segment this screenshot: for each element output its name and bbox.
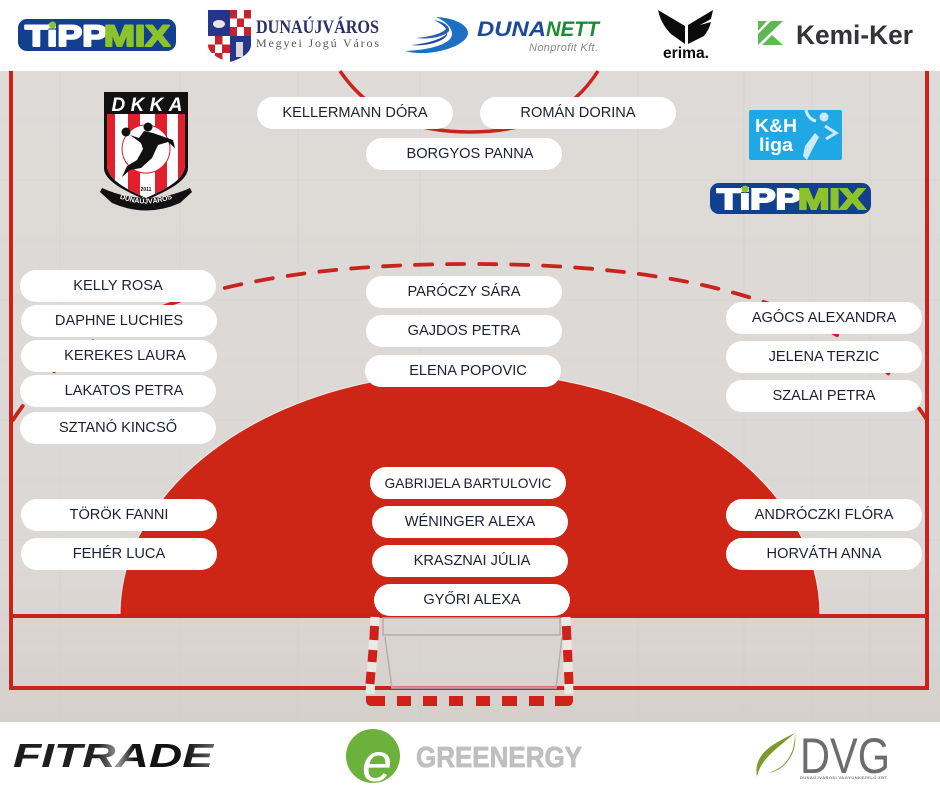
player: Agócs Alexandra: AGÓCS ALEXANDRA (752, 310, 896, 326)
player: Elena Popovic (365, 355, 561, 387)
player: Agócs Alexandra (726, 302, 922, 334)
logo: Dunaújváros crest and name (208, 10, 379, 62)
player: Kellermann Dóra: KELLERMANN DÓRA (282, 105, 428, 121)
logo: Dunanett (405, 17, 601, 54)
player: Gajdos Petra: GAJDOS PETRA (408, 323, 520, 339)
logo: DVG (756, 728, 890, 784)
player: Andróczki Flóra: ANDRÓCZKI FLÓRA (755, 507, 893, 523)
player: Török Fanni: TÖRÖK FANNI (70, 507, 168, 523)
player: Jelena Terzic: JELENA TERZIC (769, 349, 879, 365)
logo: Tippmix top: MIX (104, 20, 170, 53)
player: Krasznai Júlia (372, 545, 568, 577)
logo: DKKA club shield (100, 92, 192, 210)
logo: K&H liga: liga (759, 134, 794, 155)
player: Román Dorina (480, 97, 676, 129)
player: Sztanó Kincső (20, 412, 216, 444)
logo: K&H liga (749, 110, 842, 160)
goal (366, 617, 573, 706)
logo: DVG: DUNAÚJVÁROSI VAGYONKEZELŐ ZRT. (800, 775, 888, 780)
player: Lakatos Petra: LAKATOS PETRA (65, 383, 183, 399)
red six metre goal area (120, 372, 820, 615)
player: Andróczki Flóra (726, 499, 922, 531)
player: Gabrijela Bartulovic (370, 467, 566, 499)
player: Horváth Anna (726, 538, 922, 570)
player: Wéninger Alexa: WÉNINGER ALEXA (405, 514, 535, 530)
logo: Greenergy (346, 729, 582, 788)
player: Horváth Anna: HORVÁTH ANNA (767, 546, 881, 562)
logo: Dunaújváros crest and name: Megyei Jogú Város (256, 36, 379, 50)
court lines (11, 71, 927, 688)
player: Kellermann Dóra (257, 97, 453, 129)
logo: Tippmix league: TiPP (717, 184, 801, 216)
player: Daphne Luchies (21, 305, 217, 337)
logo: Erima (658, 10, 713, 62)
player: Kerekes Laura: KEREKES LAURA (64, 348, 186, 364)
player: Fehér Luca: FEHÉR LUCA (73, 546, 165, 562)
player: Borgyos Panna (366, 138, 562, 170)
logo: DVG: DVG (800, 728, 890, 784)
player: Szalai Petra (726, 380, 922, 412)
logo: Dunaújváros crest and name: DUNAÚJVÁROS (256, 16, 379, 38)
player: Román Dorina: ROMÁN DORINA (520, 105, 636, 121)
logo: Tippmix league (710, 183, 871, 216)
player: Szalai Petra: SZALAI PETRA (772, 388, 876, 404)
player: Borgyos Panna: BORGYOS PANNA (406, 146, 534, 162)
logo: K&H liga: K&H (755, 115, 797, 136)
logo: Kemi-Ker: Kemi-Ker (796, 20, 913, 50)
logo: DKKA club shield: 2011 (141, 187, 152, 193)
logo: Dunanett: NETT (546, 18, 601, 41)
logo: DKKA club shield: DUNAÚJVÁROS (120, 194, 172, 204)
logo: Tippmix top: TiPP (25, 20, 107, 53)
logo: Erima: erima. (663, 45, 709, 62)
logo: Greenergy: GREENERGY (416, 742, 582, 774)
player: Paróczy Sára: PARÓCZY SÁRA (408, 284, 520, 300)
player: Paróczy Sára (366, 276, 562, 308)
logo: Tippmix top (18, 19, 176, 53)
logo: Dunanett: Nonprofit Kft. (529, 42, 598, 54)
logo: Dunanett: DUNA (477, 18, 546, 41)
player: Kelly Rosa: KELLY ROSA (73, 278, 163, 294)
player: Kerekes Laura (21, 340, 217, 372)
logo: Tippmix league: MIX (798, 184, 866, 216)
player: Krasznai Júlia: KRASZNAI JÚLIA (414, 553, 530, 569)
player: Lakatos Petra (20, 375, 216, 407)
player: Fehér Luca (21, 538, 217, 570)
player: Daphne Luchies: DAPHNE LUCHIES (55, 313, 183, 329)
logo: DKKA club shield: DKKA (112, 95, 182, 116)
player: Jelena Terzic (726, 341, 922, 373)
player: Török Fanni (21, 499, 217, 531)
player: Sztanó Kincső: SZTANÓ KINCSŐ (59, 420, 177, 436)
player: Wéninger Alexa (372, 506, 568, 538)
player: Elena Popovic: ELENA POPOVIC (409, 363, 527, 379)
player: Győri Alexa (374, 584, 570, 616)
dashed free throw line (13, 264, 927, 420)
player: Gajdos Petra (366, 315, 562, 347)
player: Győri Alexa: GYŐRI ALEXA (423, 592, 521, 608)
player: Kelly Rosa (20, 270, 216, 302)
logo: Fitrade: FITRADE (13, 738, 215, 775)
player: Gabrijela Bartulovic: GABRIJELA BARTULOVIC (385, 476, 551, 491)
